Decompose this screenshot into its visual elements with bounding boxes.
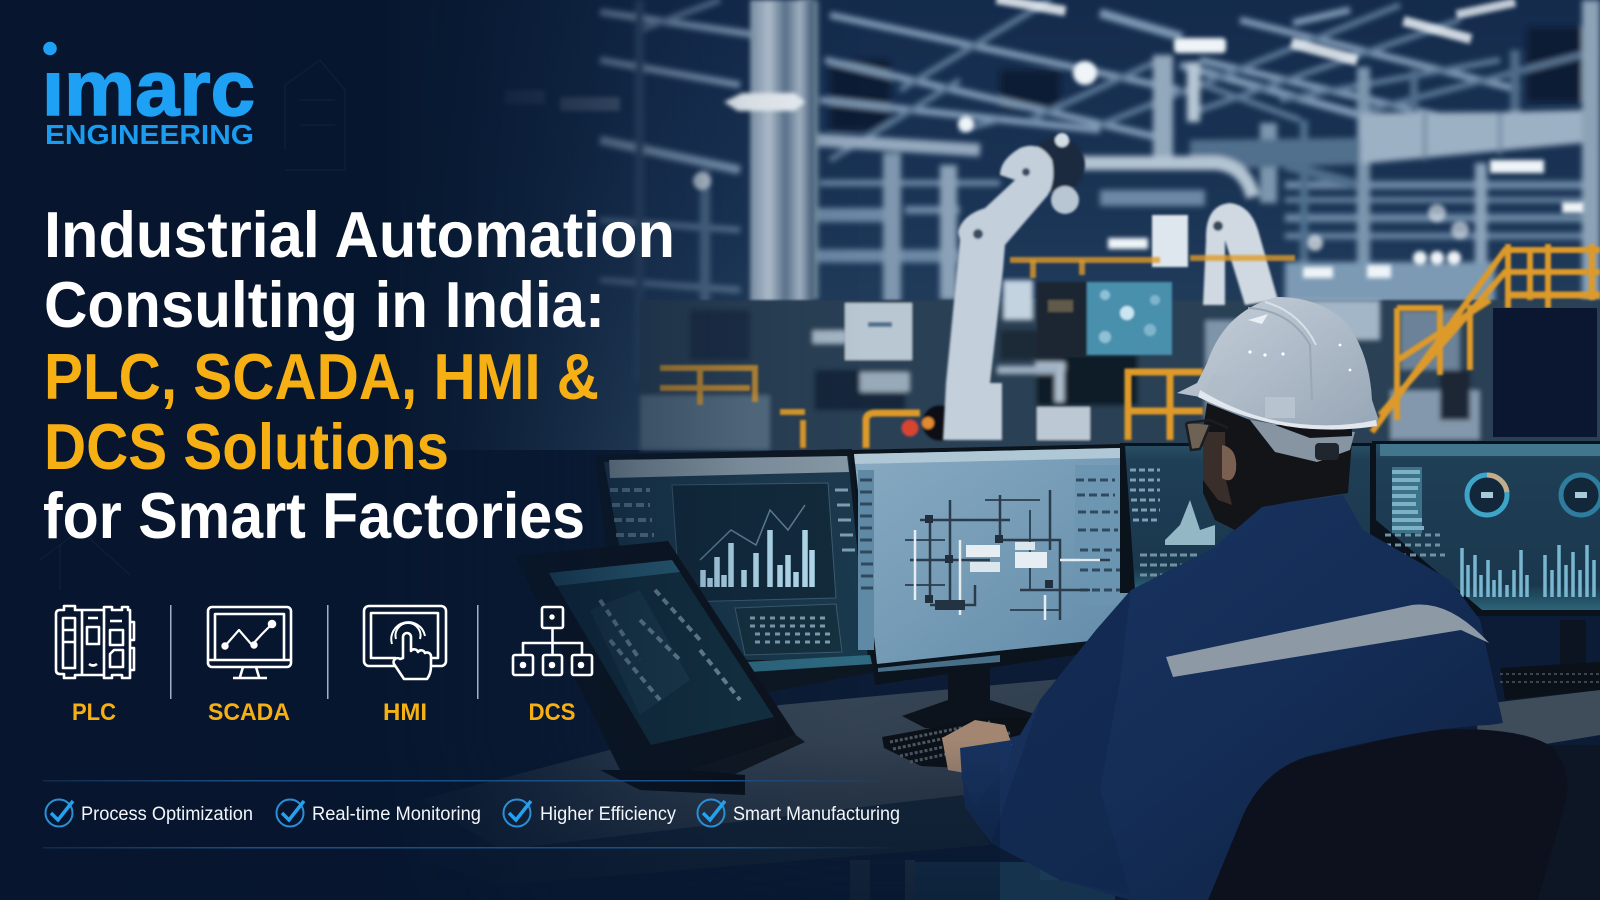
title line 1: Industrial Automation: [44, 198, 675, 271]
bottom dark overlay: [0, 740, 1000, 900]
cuff: [960, 740, 1012, 805]
benefit: higher efficiency: [504, 800, 676, 826]
dark ceiling voids: [830, 27, 1582, 130]
ceiling lamps: [505, 0, 1584, 278]
monitor 4: dashboard: [1372, 441, 1600, 616]
dark cabinet: [1493, 308, 1597, 437]
main column: [736, 0, 826, 400]
glasses: [1186, 420, 1228, 450]
title line 2: Consulting in India:: [44, 268, 605, 341]
title: [43, 198, 675, 552]
benefit: process optimization: [46, 800, 253, 826]
logo wordmark: imarc: [42, 44, 255, 132]
tablet: [515, 541, 805, 795]
cheek and beard: [1203, 432, 1232, 505]
monitor stand: [902, 668, 1048, 728]
reflective stripe: [1166, 604, 1489, 677]
icon: PLC: [56, 606, 134, 678]
factory floor machinery: [640, 215, 1600, 450]
upper rule: [43, 780, 883, 782]
orange railings: [660, 244, 1600, 448]
faint circuit decoration: [40, 60, 345, 590]
icon: SCADA monitor: [208, 607, 291, 678]
sleeve shading: [991, 590, 1131, 895]
head: [1203, 403, 1352, 530]
logo subline: ENGINEERING: [45, 119, 254, 150]
benefit: real-time monitoring: [276, 800, 481, 826]
factory hall back wall: [400, 0, 1600, 450]
benefit: process optimization: Process Optimization: [81, 804, 253, 825]
icon: HMI touch screen: [364, 606, 446, 679]
jacket: [962, 495, 1503, 900]
back screen: [1037, 282, 1172, 357]
worker: [942, 297, 1503, 900]
hard hat strap: [1250, 420, 1355, 462]
benefit: higher efficiency: Higher Efficiency: [540, 804, 676, 825]
ear: [1222, 445, 1236, 480]
duct: [1360, 110, 1582, 164]
title line 3: PLC, SCADA, HMI &: [44, 340, 599, 413]
benefits strip: [43, 780, 908, 848]
desk: [420, 620, 1600, 900]
robot arms: [943, 133, 1278, 440]
benefit: smart manufacturing: [698, 800, 900, 826]
divider: [477, 605, 478, 699]
SCADA label: SCADA: [208, 699, 290, 726]
DCS label: DCS: [528, 699, 576, 726]
columns: [635, 0, 1600, 390]
HMI label: HMI: [383, 699, 427, 726]
benefit: real-time monitoring: Real-time Monitoring: [312, 804, 481, 825]
monitor 3: [1120, 443, 1373, 593]
keyboard: [882, 717, 1042, 770]
bright bay beyond arms: [1285, 262, 1495, 308]
lower rule: [43, 847, 908, 848]
PLC label: PLC: [72, 699, 116, 726]
background clutter: [640, 280, 1480, 450]
blurred ceiling beams and structure: [600, 0, 1600, 390]
hand: [942, 720, 1012, 773]
pipes: [818, 140, 980, 150]
title line 5: for Smart Factories: [43, 479, 585, 552]
chair: [1208, 729, 1567, 900]
logo: imarc engineering: [40, 42, 255, 150]
monitor 2: process schematic: [851, 444, 1140, 685]
benefit: smart manufacturing: Smart Manufacturing: [733, 804, 900, 825]
technology icon row: [56, 605, 592, 726]
logo i-dot repositioned: [40, 42, 64, 72]
title line 4: DCS Solutions: [44, 410, 449, 483]
divider: [170, 605, 172, 699]
left dark overlay: [0, 0, 860, 900]
hard hat: [1177, 297, 1378, 429]
divider: [327, 605, 328, 699]
icon: DCS hierarchy: [513, 607, 592, 675]
monitor 1: [595, 449, 875, 692]
